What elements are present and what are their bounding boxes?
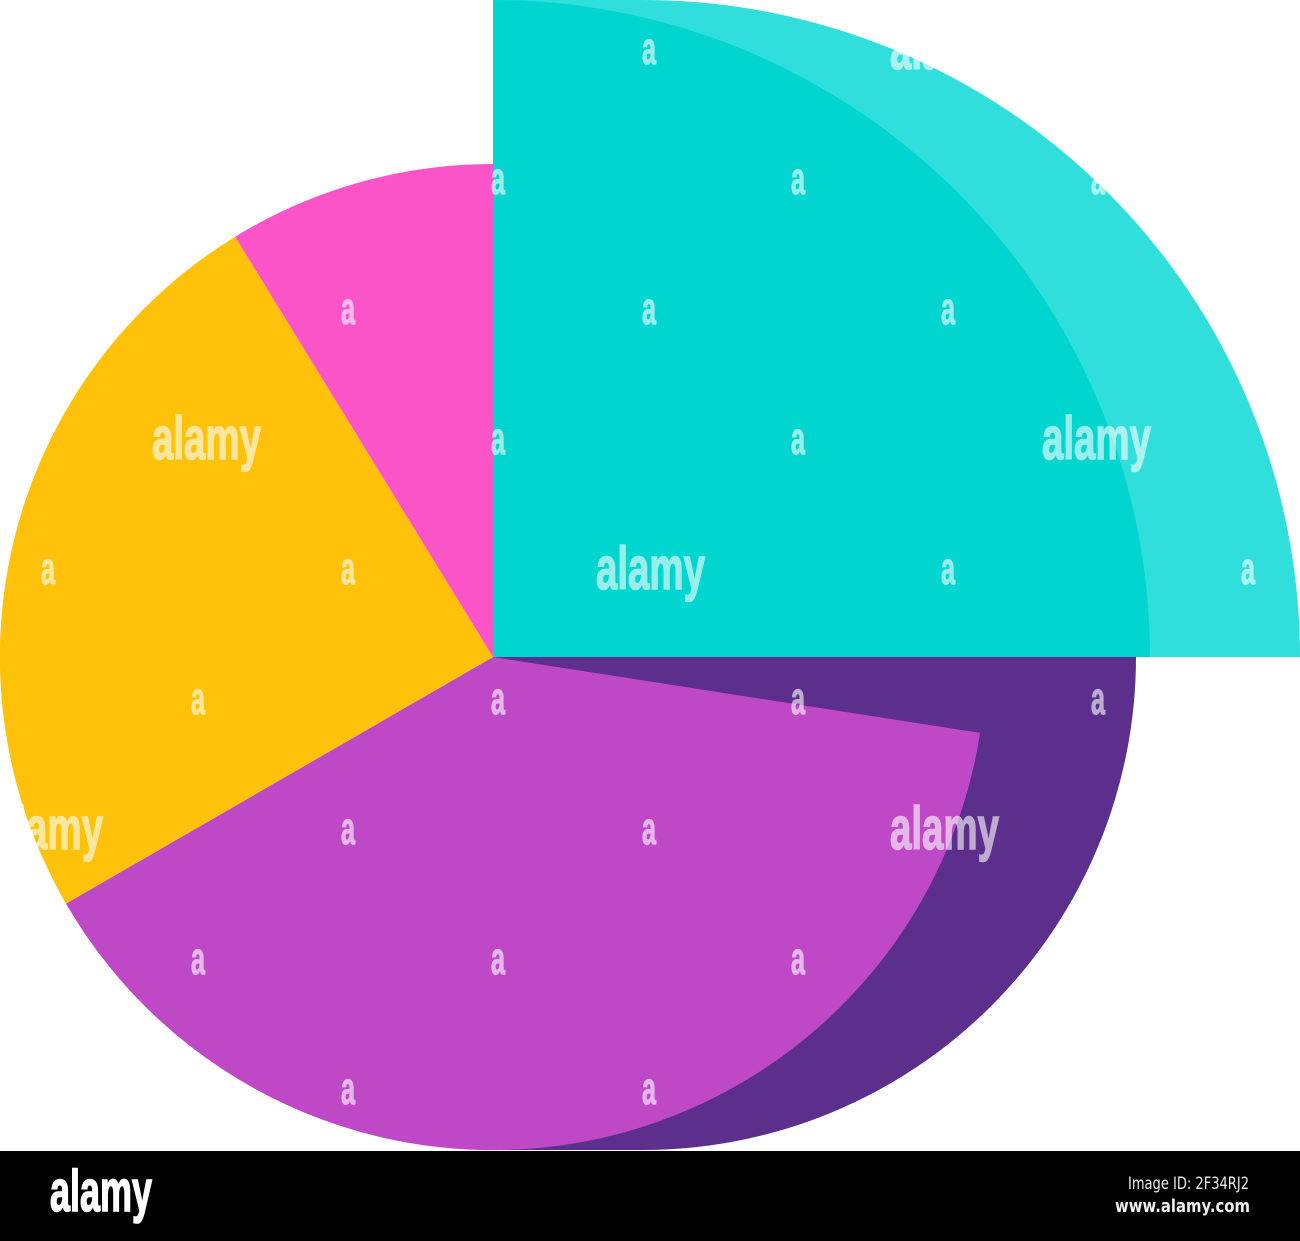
watermark: repeated alamy text: a: [491, 413, 506, 464]
watermark: repeated alamy text: alamy: [1042, 405, 1151, 472]
watermark: repeated alamy text: alamy: [596, 535, 705, 602]
watermark: repeated alamy text: a: [941, 283, 956, 334]
watermark: repeated alamy text: a: [791, 673, 806, 724]
watermark: repeated alamy text: a: [642, 1063, 657, 1114]
watermark: repeated alamy text: a: [341, 1063, 356, 1114]
slice: dark purple back layer: [493, 657, 1136, 1150]
watermark: repeated alamy text: a: [41, 543, 56, 594]
watermark: repeated alamy text: alamy: [890, 795, 999, 862]
watermark: repeated alamy text: a: [791, 413, 806, 464]
watermark: repeated alamy text: a: [941, 543, 956, 594]
watermark: repeated alamy text: a: [191, 673, 206, 724]
watermark: repeated alamy text: a: [1091, 153, 1106, 204]
watermark: repeated alamy text: a: [341, 283, 356, 334]
watermark: repeated alamy text: a: [791, 153, 806, 204]
watermark: repeated alamy text: a: [1241, 543, 1256, 594]
watermark: repeated alamy text: alamy: [890, 15, 999, 82]
footer bar: [0, 1151, 1300, 1241]
watermark: repeated alamy text: a: [191, 933, 206, 984]
watermark: repeated alamy text: a: [791, 933, 806, 984]
footer website: www.alamy.com: [1115, 1196, 1250, 1217]
watermark: repeated alamy text: a: [642, 283, 657, 334]
watermark: repeated alamy text: a: [341, 543, 356, 594]
watermark: repeated alamy text: a: [341, 803, 356, 854]
slice: light teal back layer: [493, 0, 1300, 657]
watermark: repeated alamy text: alamy: [152, 405, 261, 472]
watermark: repeated alamy text: a: [491, 933, 506, 984]
watermark: repeated alamy text: a: [642, 803, 657, 854]
footer image id: Image ID: 2F34RJ2: [1128, 1174, 1249, 1194]
watermark: repeated alamy text: a: [491, 673, 506, 724]
footer logo: alamy: [50, 1159, 152, 1224]
watermark: repeated alamy text: a: [642, 23, 657, 74]
slice: pink: [235, 164, 493, 657]
slice: teal quadrant: [493, 0, 1150, 657]
watermark: repeated alamy text: a: [1091, 673, 1106, 724]
watermark: repeated alamy text: a: [491, 153, 506, 204]
slice: magenta: [66, 657, 980, 1150]
slice: yellow: [0, 237, 493, 904]
